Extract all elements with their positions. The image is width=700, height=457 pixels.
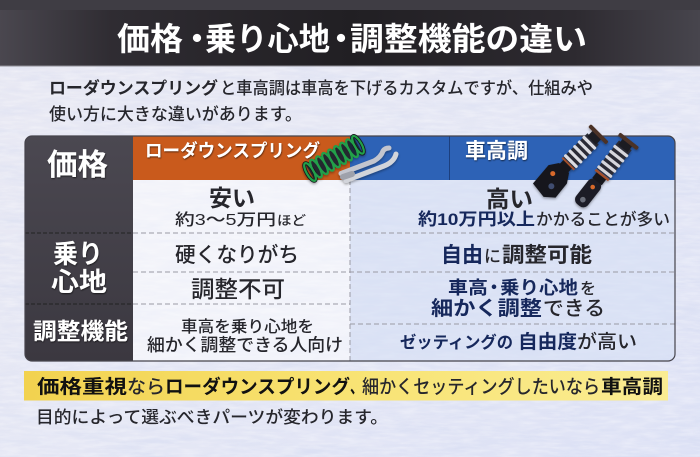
spring column cells [147, 185, 343, 355]
coilover column cells: 乗り心地 [500, 278, 578, 298]
spring column cells: 安い [209, 185, 255, 211]
intro text: ローダウンスプリング [49, 78, 218, 98]
spring column cells: 約3〜5万円 [175, 211, 276, 229]
title [117, 21, 587, 57]
highlight band: 価格重視 [37, 376, 127, 398]
icon: coilover shock absorbers [530, 123, 639, 213]
coilover column cells: 自由度 [518, 331, 577, 353]
left coilover [530, 123, 610, 203]
row heading: adjustment: 調整機能 [33, 318, 128, 344]
coilover column cells: 高い [486, 186, 533, 212]
highlight band: 、 [350, 377, 363, 398]
row heading: ride comfort: 心地 [51, 267, 107, 297]
coilover column cells: 自由 [441, 244, 483, 267]
title: ・ [325, 21, 357, 57]
coilover column cells: ゼッティングの [400, 332, 513, 352]
spring column cells: 車高を乗り心地を [181, 318, 314, 336]
coilover column cells: を [580, 280, 596, 298]
row heading: price: 価格 [47, 149, 108, 182]
coilover column cells: かかることが多い [536, 209, 670, 229]
coilover column cells [400, 186, 670, 353]
highlight band: なら [127, 376, 165, 398]
intro text [49, 78, 593, 124]
coilover column cells: 約10万円以上 [418, 210, 535, 229]
closing text: 目的によって選ぶべきパーツが変わります。 [36, 407, 388, 427]
title: 価格 [117, 21, 183, 57]
highlight band: 車高調 [601, 376, 663, 398]
row heading: ride comfort [51, 239, 107, 297]
coilover column cells: に [484, 247, 501, 266]
coilover column cells: が高い [577, 331, 637, 353]
coilover column cells: 車高 [448, 278, 488, 298]
coilover column cells: ・ [485, 278, 503, 298]
title: ・ [181, 21, 213, 57]
title: 乗り心地 [205, 21, 330, 57]
right coilover [569, 132, 639, 213]
coilover column cells: できる [543, 298, 605, 320]
intro text: と車高調は車高を下げるカスタムですが、仕組みや [220, 78, 593, 98]
spring column cells: 調整不可 [191, 276, 285, 302]
intro text: 使い方に大きな違いがあります。 [49, 104, 302, 124]
highlight band: ローダウンスプリング [165, 375, 350, 398]
column header: coilover: 車高調 [465, 140, 528, 163]
column header: lowdown spring: ローダウンスプリング [145, 140, 320, 161]
spring column cells: ほど [277, 213, 306, 228]
highlight band: 細かくセッティングしたいなら [362, 376, 600, 398]
icon: spanner wrenches [341, 148, 396, 180]
title bar [0, 0, 700, 66]
spring column cells: 硬くなりがち [175, 244, 299, 267]
row heading: ride comfort: 乗り [53, 239, 103, 269]
icon: lowdown spring [302, 134, 366, 182]
highlight band [24, 371, 668, 400]
title: 調整機能の違い [350, 21, 587, 57]
coilover column cells: 細かく調整 [431, 297, 542, 320]
coilover column cells: 調整可能 [502, 244, 592, 267]
spring column cells: 細かく調整できる人向け [147, 335, 343, 355]
comparison table [25, 136, 675, 361]
